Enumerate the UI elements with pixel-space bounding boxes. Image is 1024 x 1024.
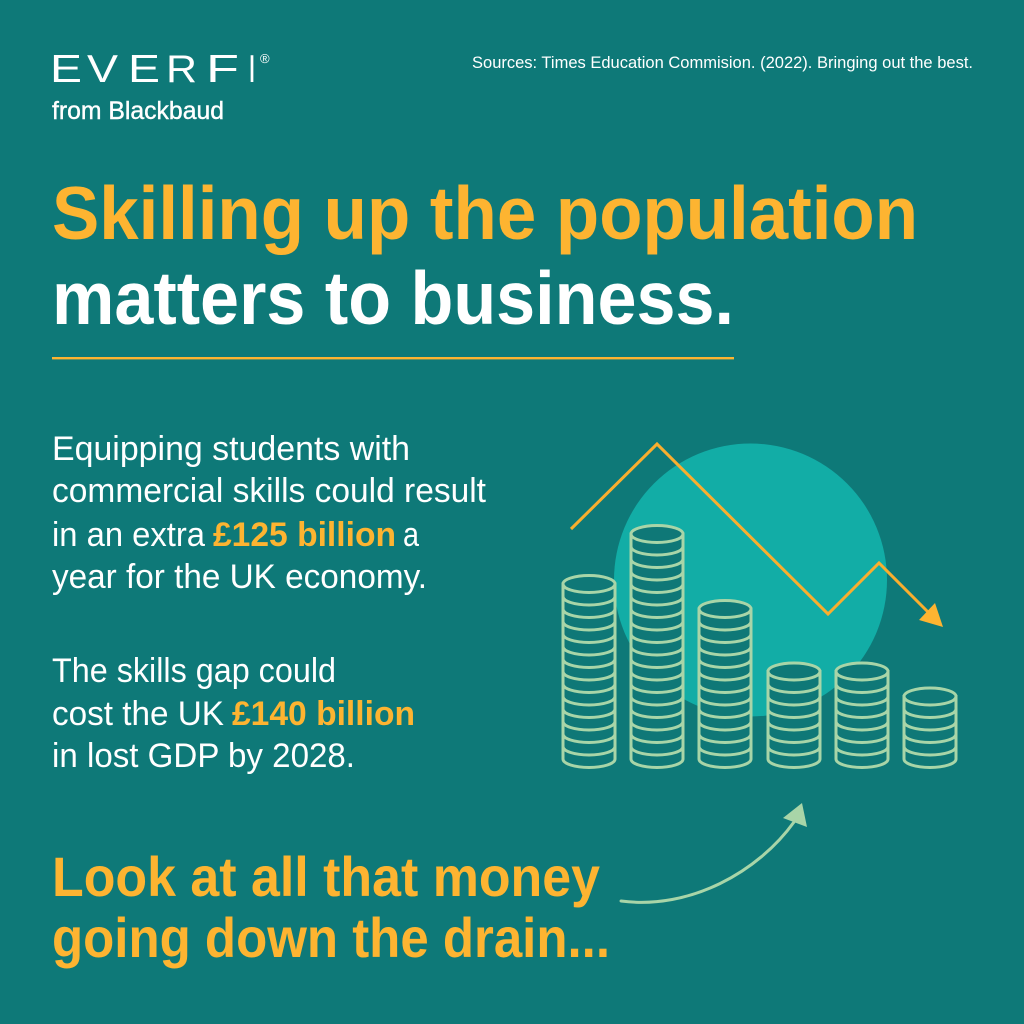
logo: EVERFI from Blackbaud: from Blackbaud	[52, 97, 224, 125]
trend line with arrow	[571, 444, 943, 627]
text block: skills gap	[52, 652, 415, 775]
logo: EVERFI from Blackbaud: V	[87, 48, 118, 91]
callout: money down the drain: going down the drain...	[52, 906, 610, 969]
coin stack 5	[836, 663, 888, 768]
title	[52, 171, 918, 340]
logo: EVERFI from Blackbaud	[50, 48, 270, 125]
text block: commercial skills: in an extra	[52, 516, 205, 554]
text block: commercial skills: a	[403, 516, 419, 554]
sources note: Sources: Times Education Commision. (2022). Bringing out the best.	[472, 54, 973, 72]
coin stack 4	[768, 663, 820, 768]
text block: commercial skills	[52, 430, 487, 596]
logo: EVERFI from Blackbaud: ®	[260, 51, 270, 66]
coin stack 3	[699, 600, 751, 768]
text block: commercial skills: Equipping students with	[52, 430, 410, 468]
logo: EVERFI from Blackbaud: I	[248, 48, 256, 91]
title: Skilling up the population	[52, 171, 918, 255]
text block: skills gap: in lost GDP by 2028.	[52, 737, 355, 775]
title: matters to business.	[52, 256, 734, 340]
logo: EVERFI from Blackbaud: E	[50, 48, 82, 91]
text block: skills gap: The skills gap could	[52, 652, 336, 690]
coin stack 6	[904, 688, 956, 768]
text block: skills gap: cost the UK	[52, 695, 224, 733]
text block: commercial skills: £125 billion	[213, 516, 396, 554]
logo: EVERFI from Blackbaud: R	[166, 48, 197, 91]
logo: EVERFI from Blackbaud: E	[128, 48, 160, 91]
text block: skills gap: £140 billion	[232, 695, 415, 733]
coin stack 1	[563, 576, 615, 768]
text block: commercial skills: commercial skills could result	[52, 472, 487, 510]
text block: commercial skills: year for the UK economy.	[52, 558, 427, 596]
callout: money down the drain: Look at all that money	[52, 845, 600, 908]
chart: falling coin stacks	[563, 444, 956, 768]
logo: EVERFI from Blackbaud: F	[206, 48, 239, 91]
coin stack 2	[631, 526, 683, 768]
callout: money down the drain	[52, 845, 610, 969]
background circle	[614, 444, 887, 716]
arrow: curved pointing to coins	[621, 803, 807, 902]
